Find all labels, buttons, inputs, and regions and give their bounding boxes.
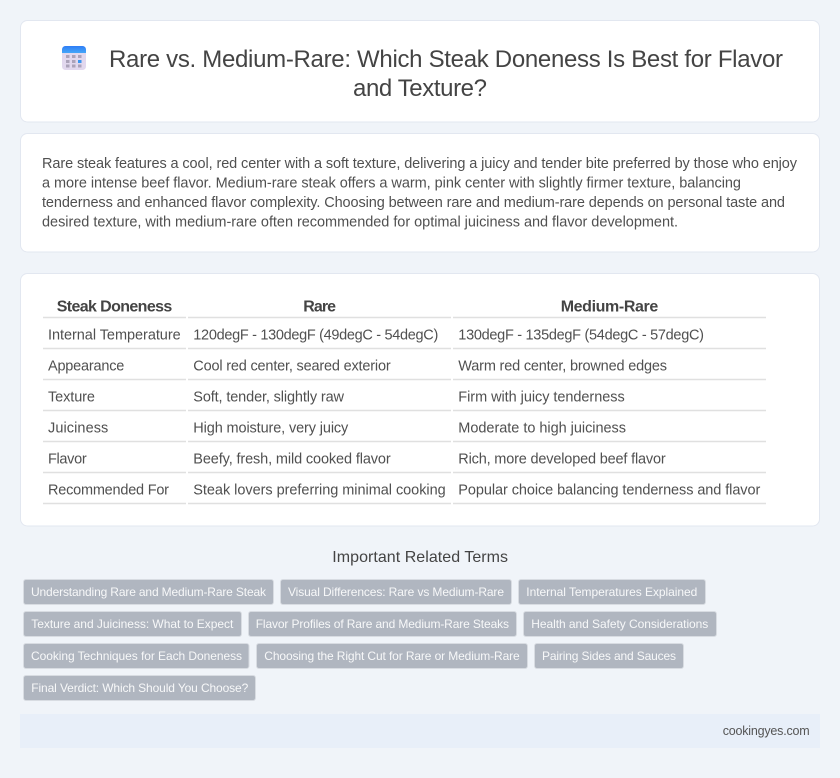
related term tags: [24, 580, 716, 700]
row: internal temperature: Internal Temperature: [48, 327, 181, 343]
tag: internal temperatures: [518, 580, 706, 604]
tag: understanding: [24, 580, 274, 604]
row: texture: Texture: [48, 389, 95, 405]
row: flavor: [48, 451, 666, 467]
icon: calendar: [62, 46, 86, 70]
tag: texture and juiciness: Texture and Juiciness: What to Expect: [31, 617, 234, 631]
tag: final verdict: [24, 676, 256, 700]
tag: pairing sides: Pairing Sides and Sauces: [542, 649, 676, 663]
table header row: Rare: [303, 299, 336, 316]
row: appearance: Cool red center, seared exterior: [193, 358, 391, 374]
tag: flavor profiles: [248, 612, 516, 636]
tag: texture and juiciness: [24, 612, 242, 636]
panel: comparison table: [20, 274, 820, 526]
panel: summary paragraph: desired texture, with medium-rare often recommended for optimal juiciness and flavor development.: [42, 214, 678, 230]
tag: understanding: Understanding Rare and Medium-Rare Steak: [31, 585, 267, 599]
row: flavor: Beefy, fresh, mild cooked flavor: [193, 451, 391, 467]
tag: health and safety: Health and Safety Considerations: [531, 617, 708, 631]
footer: [20, 714, 820, 748]
row: internal temperature: [48, 327, 704, 343]
row: recommended for: Recommended For: [48, 482, 169, 498]
row: appearance: Warm red center, browned edges: [458, 358, 667, 374]
tag: visual differences: Visual Differences: Rare vs Medium-Rare: [288, 585, 504, 599]
row: recommended for: Popular choice balancing tenderness and flavor: [458, 482, 760, 498]
row: internal temperature: 120degF - 130degF (49degC - 54degC): [193, 327, 438, 343]
panel: summary paragraph: [20, 134, 820, 252]
title: Rare vs. Medium-Rare: Which Steak Doneness Is Best for Flavor: [109, 46, 783, 73]
row: recommended for: [48, 482, 760, 498]
panel: summary paragraph: a more intense beef flavor. Medium-rare steak offers a warm, pink center with slightly firmer texture, balancing: [42, 176, 741, 192]
tag: final verdict: Final Verdict: Which Should You Choose?: [31, 681, 249, 695]
footer: cookingyes.com: [723, 724, 810, 738]
tag: internal temperatures: Internal Temperatures Explained: [526, 585, 697, 599]
tag: health and safety: [524, 612, 716, 636]
row: juiciness: High moisture, very juicy: [193, 420, 349, 436]
row: texture: Soft, tender, slightly raw: [193, 389, 345, 405]
tag: cooking techniques: [24, 644, 249, 668]
tag: flavor profiles: Flavor Profiles of Rare and Medium-Rare Steaks: [256, 617, 509, 631]
row: texture: Firm with juicy tenderness: [458, 389, 625, 405]
tag: choosing the right cut: [256, 644, 528, 668]
row: flavor: Flavor: [48, 451, 87, 467]
tag: pairing sides: [534, 644, 684, 668]
row: juiciness: Moderate to high juiciness: [458, 420, 626, 436]
tag: visual differences: [280, 580, 512, 604]
row: internal temperature: 130degF - 135degF (54degC - 57degC): [458, 327, 704, 343]
table header row: Medium-Rare: [561, 299, 658, 316]
table header row: Steak Doneness: [57, 299, 172, 316]
tag: cooking techniques: Cooking Techniques for Each Doneness: [31, 649, 242, 663]
row: juiciness: [48, 420, 626, 436]
table header row: [57, 299, 658, 316]
panel: summary paragraph: Rare steak features a cool, red center with a soft texture, delivering a juicy and tender bite preferred by those who enjoy: [42, 156, 798, 172]
row: recommended for: Steak lovers preferring minimal cooking: [193, 482, 446, 498]
row: flavor: Rich, more developed beef flavor: [458, 451, 666, 467]
row: appearance: Appearance: [48, 358, 124, 374]
tag: choosing the right cut: Choosing the Right Cut for Rare or Medium-Rare: [264, 649, 520, 663]
row: texture: [48, 389, 625, 405]
row: juiciness: Juiciness: [48, 420, 108, 436]
row: appearance: [48, 358, 667, 374]
heading: important related terms: Important Related Terms: [332, 549, 508, 566]
title: and Texture?: [353, 75, 487, 102]
panel: title header: [20, 20, 820, 122]
title: [109, 46, 783, 102]
panel: summary paragraph: tenderness and enhanced flavor complexity. Choosing between rare and medium-rare depends on personal taste and: [42, 195, 785, 211]
